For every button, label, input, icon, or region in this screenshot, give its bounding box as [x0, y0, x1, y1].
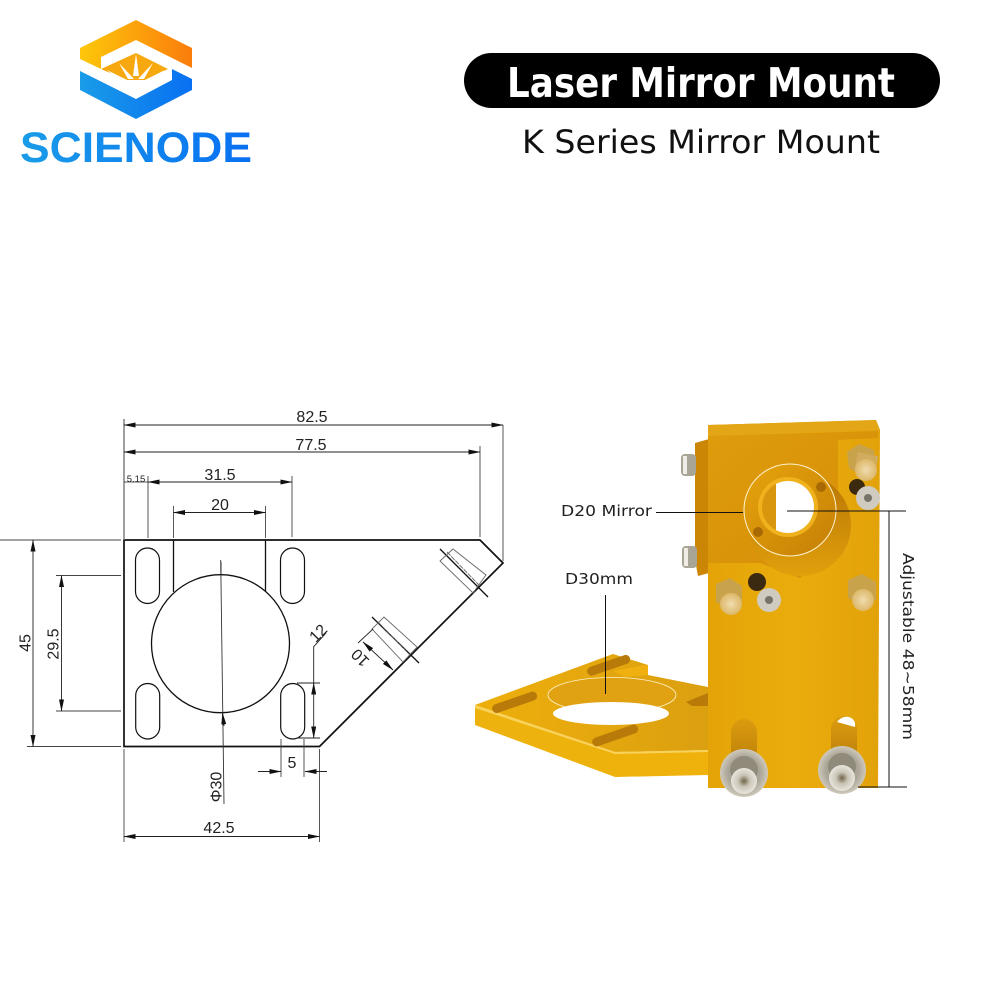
- mounting bolts: [720, 746, 866, 797]
- dimension labels: 12: [307, 621, 331, 646]
- base slots: [491, 654, 708, 748]
- side hole details: [372, 549, 488, 663]
- mirror holder ring: [744, 464, 851, 576]
- part outline: [124, 540, 503, 746]
- product photo: mirror mount: [475, 420, 880, 797]
- callout: D20 mirror: D20 Mirror: [561, 502, 653, 520]
- base plate: [475, 654, 708, 777]
- dimension labels: 10: [348, 645, 373, 669]
- dimension labels: 82.5: [296, 409, 328, 426]
- subtitle: K Series Mirror Mount: [522, 123, 880, 161]
- upper recessed face: [708, 420, 880, 578]
- logo: Scienode: [20, 20, 252, 172]
- dimension labels: 77.5: [295, 437, 327, 454]
- adjuster screws: [716, 444, 880, 615]
- callout: D30mm: D30mm: [565, 570, 633, 588]
- title pill: Laser Mirror Mount: [507, 59, 895, 107]
- dimension labels: 31.5: [204, 467, 236, 484]
- dimension labels: 5.15: [127, 474, 145, 485]
- dimension labels: 5: [288, 755, 297, 772]
- technical drawing: [0, 409, 503, 842]
- dimension lines: [0, 419, 503, 842]
- dimension labels: 42.5: [203, 820, 235, 837]
- callout: adjustable height: [787, 511, 917, 787]
- brand name: SCIENODE: [20, 124, 252, 172]
- dimension labels: 45: [18, 634, 34, 652]
- adjustment slots: [731, 716, 857, 769]
- callout: adjustable height: Adjustable 48~58mm: [899, 553, 917, 740]
- rear block: [695, 439, 709, 576]
- left side screws: [681, 454, 697, 568]
- icon: hexagon laser mark: [80, 20, 192, 119]
- main plate: [708, 420, 880, 788]
- callout: D30mm: [565, 570, 633, 694]
- dimension labels: [18, 409, 373, 837]
- dimension labels: 29.5: [46, 628, 62, 660]
- dimension labels: Φ30: [208, 772, 226, 802]
- dimension labels: 20: [211, 497, 229, 514]
